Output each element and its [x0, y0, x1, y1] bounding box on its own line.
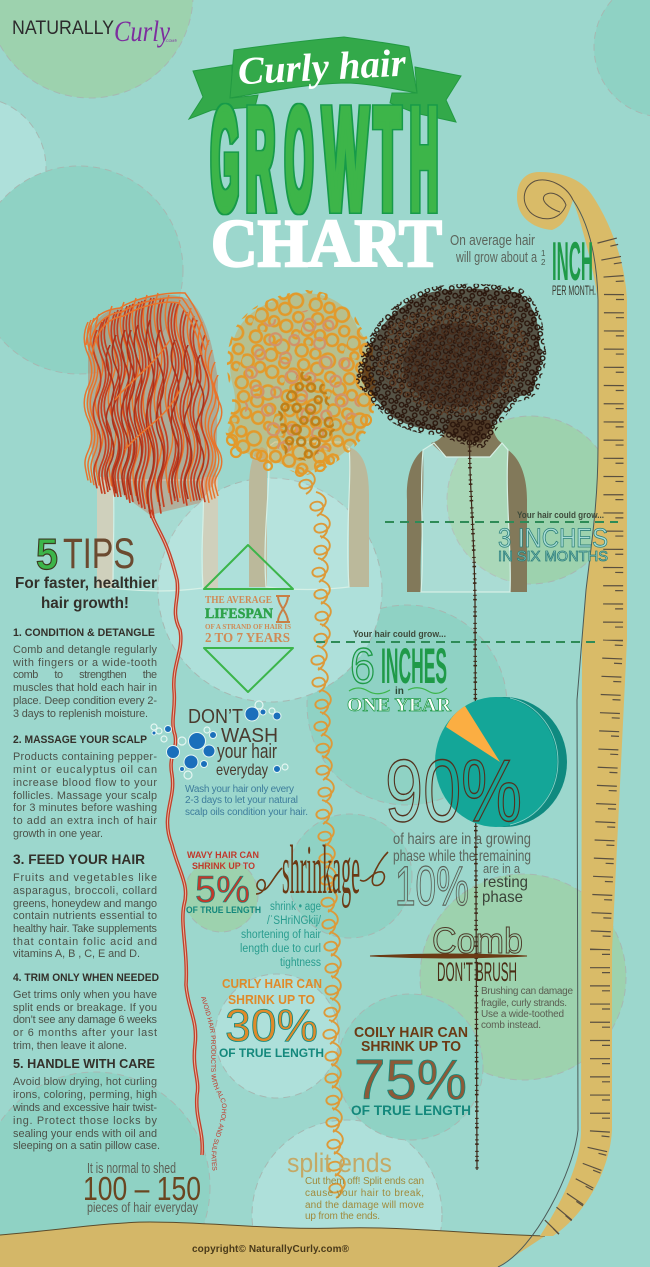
hair base tone: [88, 295, 218, 515]
hair curls: [228, 293, 373, 473]
don't wash callout: your hair: [217, 741, 277, 763]
tip 5: ing. Protect those locks by: [13, 1115, 158, 1127]
tip 4: Get trims only when you have: [13, 989, 157, 1001]
half inch per month note: [450, 230, 596, 298]
tip 5: 5. HANDLE WITH CARE: [13, 1056, 155, 1071]
hair dark core: [403, 323, 507, 407]
hair coils: [361, 289, 541, 443]
wavy shrink stat: OF TRUE LENGTH: [186, 905, 261, 915]
tip 2: to add an extra inch of hair: [13, 815, 157, 827]
stat: 90 percent: 90%: [385, 741, 522, 840]
arms: [249, 447, 369, 587]
shirt: [421, 443, 510, 592]
lifespan callout: OF A STRAND OF HAIR IS: [205, 622, 291, 631]
shirt: [265, 442, 350, 590]
copyright: copyright© NaturallyCurly.com®: [192, 1244, 350, 1255]
tip 2: 2. MASSAGE YOUR SCALP: [13, 734, 147, 746]
comb callout: [370, 920, 573, 1031]
curly shrink stat: [219, 976, 324, 1060]
tip 5: sleeping on a satin pillow case.: [13, 1140, 160, 1152]
lifespan callout: [204, 545, 293, 692]
tip 5: sealing your ends with oil and: [13, 1128, 157, 1140]
dashed line: 6 inches: [316, 641, 600, 643]
long curl strand: [299, 470, 345, 1198]
stat: 90 percent: [385, 741, 531, 865]
shrinkage definition: /ˈSHriNGkij/: [267, 915, 322, 927]
hair base tone: [228, 293, 373, 473]
tip 2: mint or eucalyptus oil can: [13, 764, 157, 776]
shrinkage definition: shortening of hair: [241, 929, 321, 941]
ringlets: [227, 344, 373, 476]
split ends callout: [287, 1148, 424, 1222]
shrinkage definition: [240, 901, 322, 969]
tip 2: follicles. Massage your scalp: [13, 790, 157, 802]
coily shrink stat: COILY HAIR CAN: [354, 1024, 468, 1041]
stat: 90 percent: phase while the remaining: [393, 848, 531, 865]
tip 4: or 6 months after your last: [13, 1027, 157, 1039]
coily shrink stat: OF TRUE LENGTH: [351, 1102, 471, 1118]
tip 2: increase blood flow to your: [13, 777, 157, 789]
arms: [407, 450, 527, 592]
callout: 3 inches: IN SIX MONTHS: [498, 548, 608, 565]
shrinkage wordmark: [256, 832, 388, 909]
text: shrinkage: [282, 832, 360, 909]
tip 5: irons, coloring, perming, high: [13, 1089, 157, 1101]
tip 2: growth in one year.: [13, 828, 103, 840]
tip 1: Comb and detangle regularly: [13, 644, 158, 656]
logo: Curly: [114, 15, 171, 48]
callout: 3 inches: Your hair could grow...: [517, 510, 604, 520]
tip 1: [12, 627, 158, 720]
avoid products note along strand: AVOID HAIR PRODUCTS WITH ALCOHOL AND SULFATES: [201, 997, 226, 1170]
five tips heading: For faster, healthier: [15, 575, 157, 592]
figure: coily hair person: [361, 289, 541, 1170]
figure: curly hair person: [227, 293, 373, 1198]
text: H: [410, 78, 438, 240]
heading: growth: T: [374, 78, 401, 240]
hair lighter coils: [375, 305, 530, 415]
half inch per month note: 2: [541, 258, 546, 267]
tip 3: that contain folic acid and: [13, 936, 157, 948]
comb callout: DON’T BRUSH: [437, 957, 517, 987]
heading: growth: [211, 78, 438, 240]
tip 4: split ends or breakage. If you: [13, 1002, 157, 1014]
comb callout: Brushing can damage: [481, 986, 573, 997]
tip 5: winds and excessive hair twist-: [12, 1102, 157, 1114]
tip 3: [13, 852, 158, 960]
comb callout: Use a wide-toothed: [481, 1009, 564, 1020]
wavy shrink stat: SHRINK UP TO: [192, 861, 255, 872]
half inch per month note: 1: [541, 249, 546, 258]
measuring tape: [498, 172, 627, 1267]
wavy shrink stat: [186, 850, 261, 915]
figure: wavy hair person: [84, 293, 222, 1155]
heading: growth: O: [285, 78, 313, 240]
coily shrink stat: 75%: [354, 1048, 467, 1112]
callout: 6 inches: in: [395, 686, 404, 697]
split ends callout: and the damage will move: [305, 1200, 424, 1211]
tip 4: 4. TRIM ONLY WHEN NEEDED: [13, 972, 159, 984]
wavy shrink stat: WAVY HAIR CAN: [187, 850, 259, 861]
tip 3: healthy hair. Take supplements: [13, 923, 158, 935]
tip 1: place. Deep condition every 2-: [13, 695, 157, 707]
logo: .COM®: [165, 39, 177, 43]
tip 4: trim, then leave it alone.: [13, 1040, 127, 1052]
half inch per month note: On average hair: [450, 232, 535, 249]
curly shrink stat: 30%: [225, 1000, 318, 1051]
tip 2: for 3 minutes before washing: [13, 802, 157, 814]
tip 3: 3. FEED YOUR HAIR: [13, 852, 145, 867]
tip 3: greens, honeydew and mango: [13, 898, 157, 910]
callout: 6 inches: ONE YEAR: [347, 695, 451, 716]
comb callout: fragile, curly strands.: [481, 998, 567, 1009]
comb callout: Comb: [432, 920, 523, 961]
coily shrink stat: [351, 1024, 471, 1118]
text: INCHES: [381, 638, 447, 694]
bottom ground band: [0, 1222, 545, 1267]
callout: 6 inches: 6: [350, 638, 375, 694]
curly shrink stat: OF TRUE LENGTH: [219, 1046, 324, 1060]
don't wash callout: everyday: [216, 762, 268, 779]
shrinkage definition: shrink • age: [270, 901, 321, 913]
split ends callout: up from the ends.: [305, 1211, 380, 1222]
don't wash callout: DON’T: [188, 706, 243, 728]
heading: chart: CHART: [211, 205, 442, 281]
tip 2: Products containing pepper-: [13, 751, 157, 763]
lifespan callout: THE AVERAGE: [205, 595, 272, 606]
half inch per month note: will grow about a: [455, 249, 537, 266]
tip 3: Fruits and vegetables like: [13, 872, 157, 884]
tip 1: comb to strengthen the: [13, 669, 157, 681]
half inch per month note: PER MONTH.: [552, 282, 596, 298]
five tips heading: 5: [36, 530, 58, 579]
don't wash callout: [151, 701, 308, 818]
stat: 10 percent: 10%: [395, 854, 469, 917]
logo: [12, 15, 177, 48]
lifespan callout: 2 TO 7 YEARS: [205, 631, 290, 646]
tip 4: don’t see any damage 6 weeks: [13, 1014, 158, 1026]
five tips heading: [15, 530, 157, 612]
logo: NATURALLY: [12, 17, 114, 39]
title banner: [189, 37, 461, 122]
tip 3: asparagus, broccoli, collard: [13, 885, 157, 897]
title banner: Curly hair: [237, 41, 408, 93]
callout: 6 inches: [347, 629, 451, 716]
shed stat: [83, 1160, 201, 1215]
split ends callout: split ends: [287, 1148, 392, 1178]
arms: [97, 477, 218, 588]
don't wash callout: 2-3 days to let your natural: [185, 795, 298, 806]
callout: 3 inches: [498, 510, 608, 565]
shed stat: pieces of hair everyday: [87, 1200, 198, 1215]
stat: 10 percent: are in a: [483, 861, 521, 876]
icon: hourglass: [276, 596, 290, 622]
heading: growth: W: [323, 78, 368, 240]
tip 2: [13, 734, 157, 840]
tip 1: muscles that hold each hair in: [13, 682, 157, 694]
stat: 10 percent: resting: [483, 874, 528, 891]
shed stat: 100 – 150: [83, 1170, 201, 1207]
coily shrink stat: SHRINK UP TO: [361, 1038, 461, 1055]
lifespan callout: LIFESPAN: [205, 606, 273, 622]
shrinkage definition: tightness: [280, 957, 321, 969]
curly shrink stat: CURLY HAIR CAN: [222, 976, 322, 991]
callout: 6 inches: Your hair could grow...: [353, 629, 446, 640]
heading: growth: R: [246, 78, 275, 240]
shirt: [113, 480, 203, 591]
split ends callout: cause your hair to break,: [305, 1188, 424, 1199]
hair base tone: [361, 289, 541, 443]
dashed line: 3 inches: [385, 521, 618, 523]
stat: 90 percent: of hairs are in a growing: [393, 831, 531, 848]
comb callout: comb instead.: [481, 1020, 541, 1031]
neck: [431, 420, 502, 457]
don't wash callout: WASH: [221, 725, 278, 747]
tip 1: 1. CONDITION & DETANGLE: [13, 627, 155, 639]
curly shrink stat: SHRINK UP TO: [228, 992, 315, 1007]
don't wash callout: Wash your hair only every: [185, 784, 294, 795]
shrinkage definition: length due to curl: [240, 943, 321, 955]
tip 3: contain nutrients essential to: [13, 910, 157, 922]
hair lighter curls: [245, 310, 360, 460]
tip 4: [13, 972, 159, 1052]
five tips heading: hair growth!: [41, 595, 129, 612]
tip 3: vitamins A, B , C, E and D.: [13, 948, 140, 960]
split ends callout: Cut them off! Split ends can: [305, 1176, 424, 1187]
icon: bubbles: [151, 701, 288, 779]
hair strands: [84, 293, 222, 504]
heading: growth: G: [211, 78, 239, 240]
five tips heading: TIPS: [63, 530, 135, 578]
long strand: [150, 510, 202, 1155]
don't wash callout: scalp oils condition your hair.: [185, 807, 308, 818]
tip 5: Avoid blow drying, hot curling: [13, 1076, 157, 1088]
tip 1: with fingers or a wide-tooth: [12, 657, 157, 669]
tip 5: [12, 1056, 160, 1152]
shed stat: It is normal to shed: [87, 1160, 176, 1177]
pie chart: [435, 697, 567, 827]
long coily strand: [470, 430, 477, 1170]
wavy shrink stat: 5%: [195, 869, 250, 911]
tip 1: 3 days to replenish moisture.: [13, 708, 148, 720]
crown: [86, 293, 208, 450]
hair dark curls: [278, 370, 335, 462]
callout: 3 inches: 3 INCHES: [498, 523, 608, 553]
stat: 10 percent: phase: [482, 889, 523, 906]
